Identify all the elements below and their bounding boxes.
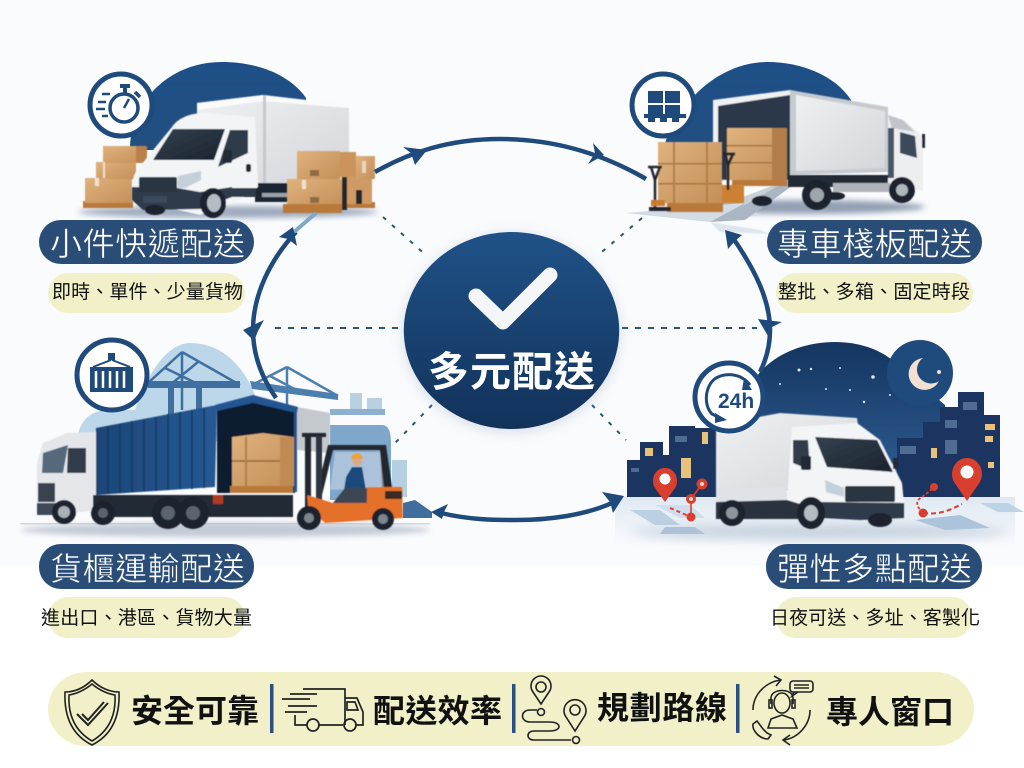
text: 配送效率: 配送效率 [373,693,502,729]
heading: 專車棧板配送: 專車棧板配送 [777,226,972,262]
heading: 小件快遞配送: 小件快遞配送 [50,226,245,262]
panel: container transport delivery [20,340,432,638]
divider [512,684,516,733]
stars [779,367,891,403]
moon badge [887,340,953,406]
icon: fast truck [282,689,363,731]
heading: 彈性多點配送: 彈性多點配送 [777,551,972,587]
night sky backdrop [725,342,945,490]
description: 日夜可送、多址、客製化: 日夜可送、多址、客製化 [770,607,980,629]
navy backdrop circle [130,62,306,150]
divider [736,684,740,733]
pallet of boxes with pallet jacks [648,142,744,212]
street map ground [615,497,1024,545]
title: 多元配送 [428,349,595,395]
panel: small parcel delivery [39,62,378,313]
dashed connectors [275,217,757,443]
divider [270,684,274,733]
description: 進出口、港區、貨物大量: 進出口、港區、貨物大量 [41,607,252,629]
white truck with open rear [713,90,925,210]
icon: 24 hours: 24h [718,390,754,413]
description: 即時、單件、少量貨物 [48,273,245,313]
ground and ramp [625,180,925,234]
text: 安全可靠: 安全可靠 [131,693,259,729]
icon: check mark [476,275,550,322]
center badge [402,232,620,433]
panel: dedicated truck tail-lift delivery [625,62,982,313]
route markers left [653,468,708,522]
ground shadow [78,206,378,218]
panel: flexible multi-stop delivery [615,340,1024,638]
text: 規劃路線: 規劃路線 [597,690,727,726]
arrow: bottom arc [431,492,624,520]
icon: 24 hours [695,363,763,431]
arrow: top arc [375,139,646,179]
description: 即時、單件、少量貨物: 即時、單件、少量貨物 [52,281,243,303]
arrow: right arc [725,230,782,372]
icon: stopwatch [90,74,152,136]
navy backdrop circle [665,62,851,160]
route markers right [917,458,982,518]
night city buildings [627,392,1000,497]
icon: customer service agent [753,676,813,745]
description: 日夜可送、多址、客製化 [770,597,980,638]
right stack of boxes and pallet jack [283,151,375,213]
container truck [37,395,330,529]
left stack of boxes [83,146,147,208]
white box truck [132,95,349,218]
icon: container [77,340,147,410]
heading: 貨櫃運輸配送: 貨櫃運輸配送 [50,551,245,587]
icon: route with pins [522,676,586,744]
text: 專人窗口: 專人窗口 [826,694,954,730]
description: 整批、多箱、固定時段 [776,273,973,313]
icon: pallet of boxes [632,74,694,136]
description: 進出口、港區、貨物大量 [41,597,252,638]
icon: shield [65,680,119,745]
port backdrop with cranes [20,343,432,537]
forklift with driver [297,433,403,530]
feature bar [48,672,974,746]
white delivery truck [716,413,904,529]
arrow: left arc [243,213,316,398]
description: 整批、多箱、固定時段: 整批、多箱、固定時段 [778,281,970,303]
